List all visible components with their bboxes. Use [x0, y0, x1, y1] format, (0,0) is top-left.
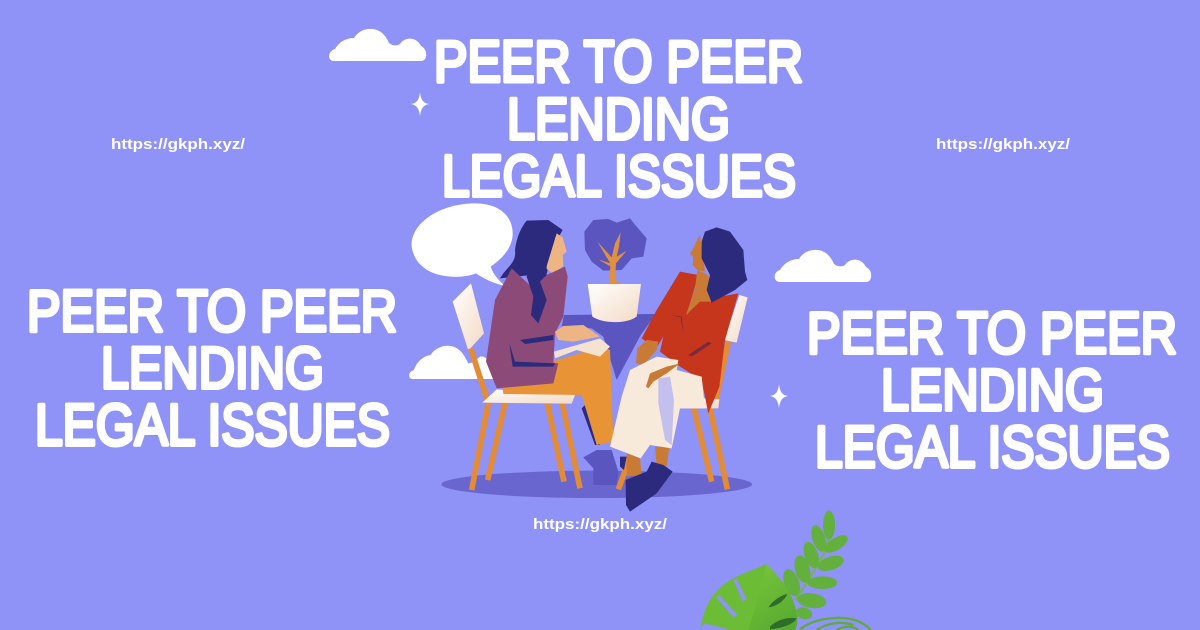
icon: top cloud	[329, 29, 426, 61]
plant foliage	[584, 218, 647, 271]
trouser leg	[502, 347, 613, 445]
resting hand	[646, 363, 680, 388]
shoe	[583, 450, 618, 485]
table	[562, 314, 656, 380]
leaf fold	[701, 564, 766, 630]
monstera leaf	[701, 564, 797, 630]
jacket	[486, 267, 568, 388]
title: top: LEGAL ISSUES	[442, 144, 796, 209]
title: left: LEGAL ISSUES	[35, 393, 390, 458]
right chair	[618, 295, 748, 489]
left chair	[453, 283, 580, 490]
face	[546, 233, 567, 274]
title: top: PEER TO PEER	[434, 30, 803, 94]
blouse	[642, 272, 738, 413]
url: left: https://gkph.xyz/	[111, 136, 246, 153]
illustration: plant in bottom corner	[701, 511, 871, 630]
plant pot	[588, 284, 641, 322]
hand	[555, 325, 600, 342]
curved frond	[800, 618, 871, 630]
icon: cloud behind chair	[409, 346, 495, 379]
hand	[636, 340, 658, 365]
leaf holes	[768, 594, 797, 629]
title: right: LENDING	[881, 358, 1104, 423]
shoes	[626, 462, 673, 512]
blouse shadow	[670, 315, 712, 357]
url: right: https://gkph.xyz/	[936, 136, 1071, 153]
title: left: PEER TO PEER	[27, 279, 397, 344]
leaf cuts	[702, 579, 747, 630]
title: left	[27, 279, 397, 458]
icon: right sparkle	[770, 384, 788, 408]
title: right	[807, 301, 1177, 480]
right woman	[610, 227, 747, 512]
url: bottom: https://gkph.xyz/	[533, 516, 668, 533]
hair	[702, 227, 747, 303]
title: left: LENDING	[101, 336, 324, 401]
icon: right cloud	[775, 250, 871, 282]
jacket shadow	[509, 335, 555, 367]
icon: top sparkle	[411, 92, 429, 116]
icon: speech bubble	[412, 203, 513, 286]
title: top: LENDING	[507, 87, 730, 152]
title: top	[434, 30, 803, 209]
hair front	[527, 233, 557, 323]
chair seat	[680, 397, 719, 408]
chair back	[724, 295, 748, 343]
illustration: two women talking	[409, 203, 752, 512]
plant trunk	[597, 232, 627, 283]
knee texture	[658, 377, 674, 445]
chair back	[453, 283, 484, 351]
lower leg	[627, 453, 642, 477]
knee highlight	[554, 338, 610, 358]
left woman	[486, 220, 627, 485]
face and neck	[686, 235, 712, 315]
hair back	[500, 220, 563, 278]
trousers	[610, 357, 705, 458]
chair seat	[482, 389, 575, 404]
floor shadow	[441, 471, 752, 498]
rear foot	[582, 403, 600, 445]
plant branch	[598, 259, 611, 267]
fern leaves	[780, 511, 850, 621]
fern stem	[795, 537, 829, 600]
